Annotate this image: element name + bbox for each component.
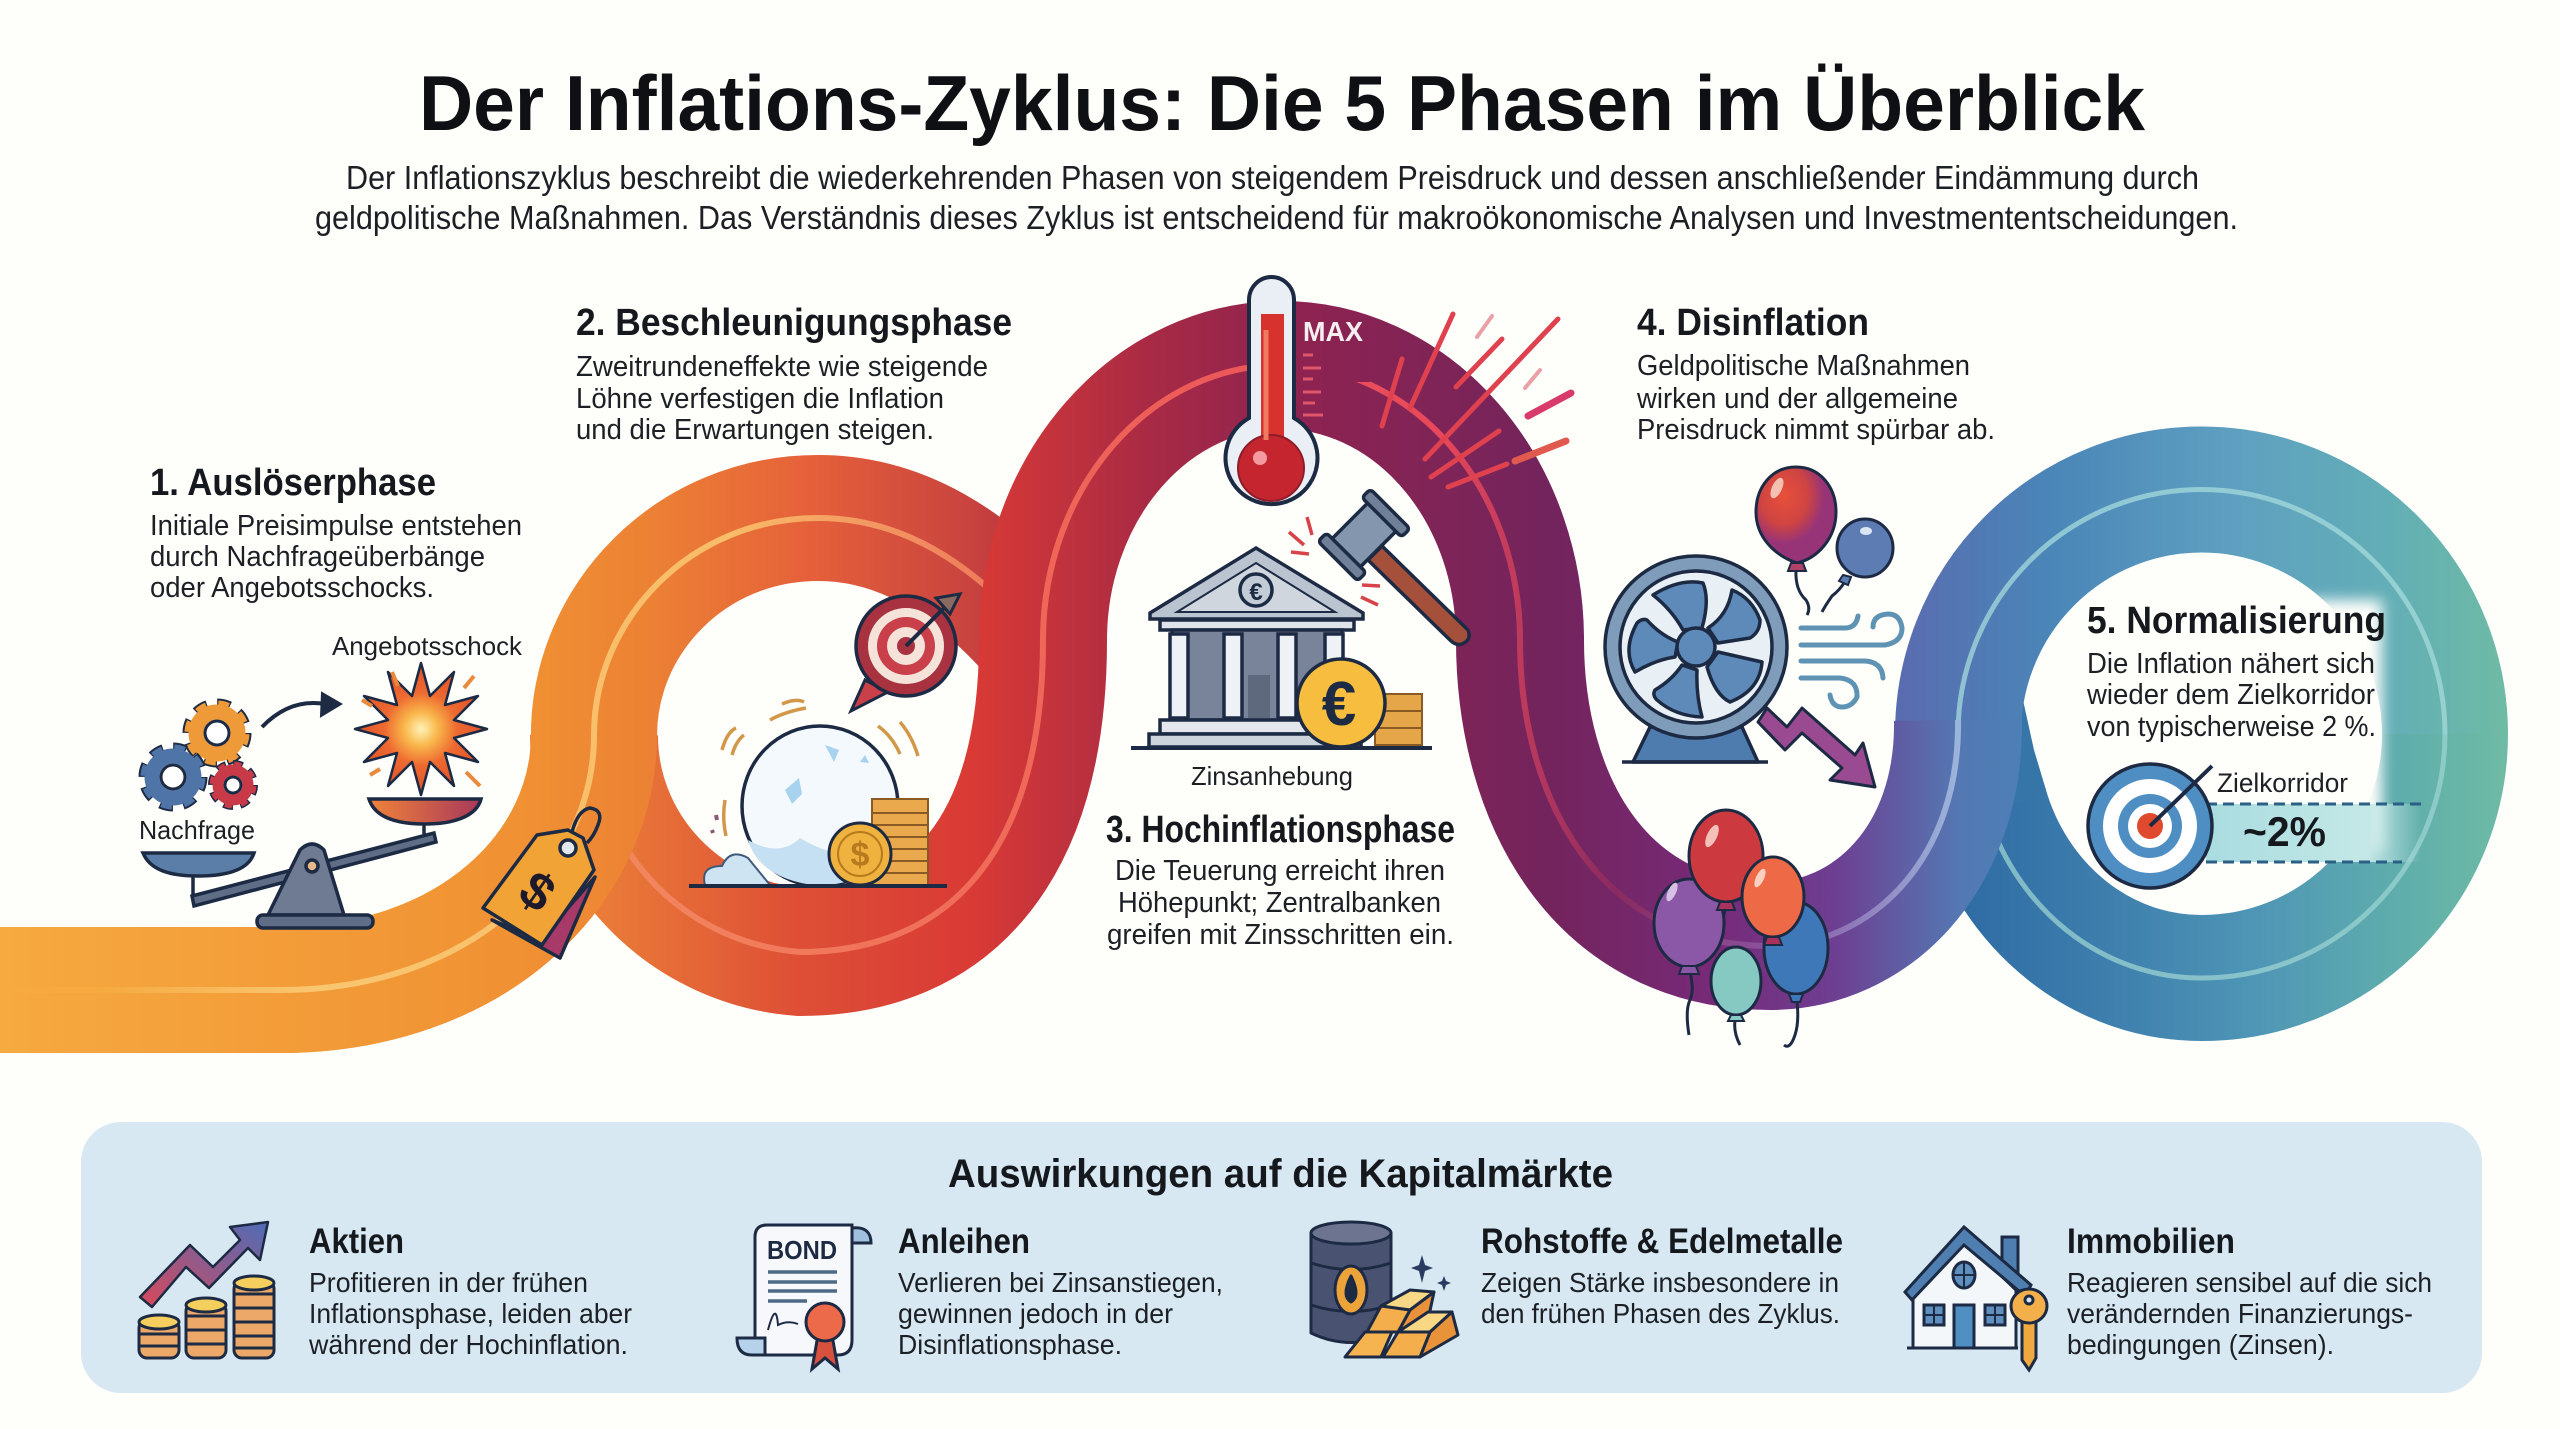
icon: bond document: [737, 1225, 871, 1369]
phase 4 text: Geldpolitische Maßnahmen: [1637, 350, 1970, 382]
chart: target corridor: Zielkorridor: [2217, 768, 2348, 798]
icon: snowball with coins: $: [851, 836, 870, 874]
icon: central bank: [1149, 548, 1363, 747]
phase 4 text: [1636, 302, 1995, 446]
column: Anleihen: Disinflationsphase.: [898, 1329, 1122, 1360]
label: Zinsanhebung: Zinsanhebung: [1191, 761, 1353, 791]
column: Rohstoffe: Rohstoffe & Edelmetalle: [1481, 1222, 1843, 1261]
phase 1 text: oder Angebotsschocks.: [150, 572, 434, 604]
phase 2 text: Zweitrundeneffekte wie steigende: [576, 351, 988, 383]
phase 1 text: durch Nachfrageüberbänge: [150, 541, 485, 573]
icon: fan: [1605, 556, 1787, 762]
icon: balance scale: [143, 799, 481, 928]
phase 1 text: 1. Auslöserphase: [150, 462, 436, 504]
column: Immobilien: [2067, 1222, 2432, 1360]
column: Rohstoffe: den frühen Phasen des Zyklus.: [1481, 1298, 1840, 1329]
phase 4 text: 4. Disinflation: [1637, 302, 1869, 344]
chart: target corridor: ~2%: [2243, 808, 2326, 855]
column: Immobilien: bedingungen (Zinsen).: [2067, 1329, 2334, 1360]
column: Aktien: Aktien: [309, 1222, 404, 1261]
phase 3 text: 3. Hochinflationsphase: [1106, 809, 1455, 851]
intro text: geldpolitische Maßnahmen. Das Verständnis dieses Zyklus ist entscheidend für makroökonomische Analysen und Investmententscheidungen.: [315, 199, 2238, 236]
column: Immobilien: verändernden Finanzierungs-: [2067, 1298, 2413, 1329]
column: Rohstoffe: Zeigen Stärke insbesondere in: [1481, 1267, 1839, 1298]
chart: target corridor: [2088, 764, 2427, 888]
label: MAX: MAX: [1303, 316, 1363, 347]
column: Anleihen: Verlieren bei Zinsanstiegen,: [898, 1267, 1223, 1298]
phase 5 text: [2086, 600, 2386, 743]
panel heading: Auswirkungen auf die Kapitalmärkte: [948, 1152, 1613, 1196]
phase 5 text: 5. Normalisierung: [2087, 600, 2386, 642]
column: Aktien: Profitieren in der frühen: [309, 1267, 588, 1298]
phase 4 text: wirken und der allgemeine: [1636, 383, 1958, 415]
icon: oil barrel and gold: [1311, 1222, 1458, 1357]
column: Anleihen: Anleihen: [898, 1222, 1030, 1261]
phase 5 text: wieder dem Zielkorridor: [2086, 679, 2375, 711]
phase 5 text: Die Inflation nähert sich: [2087, 648, 2375, 680]
icon: target speech bubble: [851, 594, 960, 711]
column: Anleihen: [898, 1222, 1223, 1360]
icon: thermometer: [1226, 277, 1323, 504]
phase 4 text: Preisdruck nimmt spürbar ab.: [1637, 414, 1995, 446]
title: Der Inflations-Zyklus: Die 5 Phasen im Überblick: [419, 59, 2146, 147]
icon: snowball with coins: [689, 700, 947, 886]
phase 1 text: Initiale Preisimpulse entstehen: [150, 510, 522, 542]
icon: burst: [355, 663, 487, 795]
intro text: [315, 159, 2238, 236]
icon: stocks chart: [139, 1222, 274, 1358]
phase 3 text: greifen mit Zinsschritten ein.: [1107, 919, 1454, 951]
phase 2 text: und die Erwartungen steigen.: [576, 414, 934, 446]
panel: capital markets: [81, 1122, 2482, 1393]
phase 2 text: 2. Beschleunigungsphase: [576, 302, 1012, 344]
icon: gavel: [1289, 489, 1469, 644]
icon: bond document: BOND: [767, 1235, 837, 1265]
icon: price tag: $: [509, 860, 566, 924]
label: Nachfrage: Nachfrage: [139, 815, 255, 845]
phase 2 text: Löhne verfestigen die Inflation: [576, 383, 944, 415]
icon: price tag: [483, 808, 600, 958]
phase 5 white patch: [2290, 600, 2382, 850]
intro text: Der Inflationszyklus beschreibt die wiederkehrenden Phasen von steigendem Preisdruck und dessen anschließender Eindämmung durch: [346, 159, 2199, 196]
arrow: demand to shock: [262, 693, 341, 727]
phase 1 text: [150, 462, 522, 604]
label: Angebotsschock: Angebotsschock: [332, 631, 523, 661]
icon: euro coin and stack: €: [1322, 670, 1356, 739]
column: Immobilien: Reagieren sensibel auf die sich: [2067, 1267, 2432, 1298]
column: Aktien: Inflationsphase, leiden aber: [309, 1298, 632, 1329]
phase 2 text: [576, 302, 1012, 446]
column: Rohstoffe: [1481, 1222, 1843, 1329]
icon: house and key: [1905, 1227, 2047, 1370]
icon: central bank: €: [1249, 579, 1263, 606]
phase 3 text: Höhepunkt; Zentralbanken: [1118, 887, 1441, 919]
phase 3 text: [1106, 809, 1455, 951]
icon: impact rays: [1382, 314, 1571, 487]
icon: gears: [148, 708, 251, 803]
cycle ribbon: [0, 352, 2445, 990]
column: Aktien: während der Hochinflation.: [308, 1329, 628, 1360]
icon: euro coin and stack: [1131, 659, 1432, 748]
icon: balloons deflating: [1756, 467, 1893, 615]
icon: balloon cluster: [1654, 810, 1828, 1046]
phase 5 text: von typischerweise 2 %.: [2087, 711, 2376, 743]
column: Anleihen: gewinnen jedoch in der: [898, 1298, 1173, 1329]
column: Immobilien: Immobilien: [2067, 1222, 2235, 1261]
icon: falling arrow: [1758, 708, 1875, 787]
phase 3 text: Die Teuerung erreicht ihren: [1115, 855, 1445, 887]
column: Aktien: [308, 1222, 632, 1360]
icon: wind lines: [1801, 614, 1902, 707]
